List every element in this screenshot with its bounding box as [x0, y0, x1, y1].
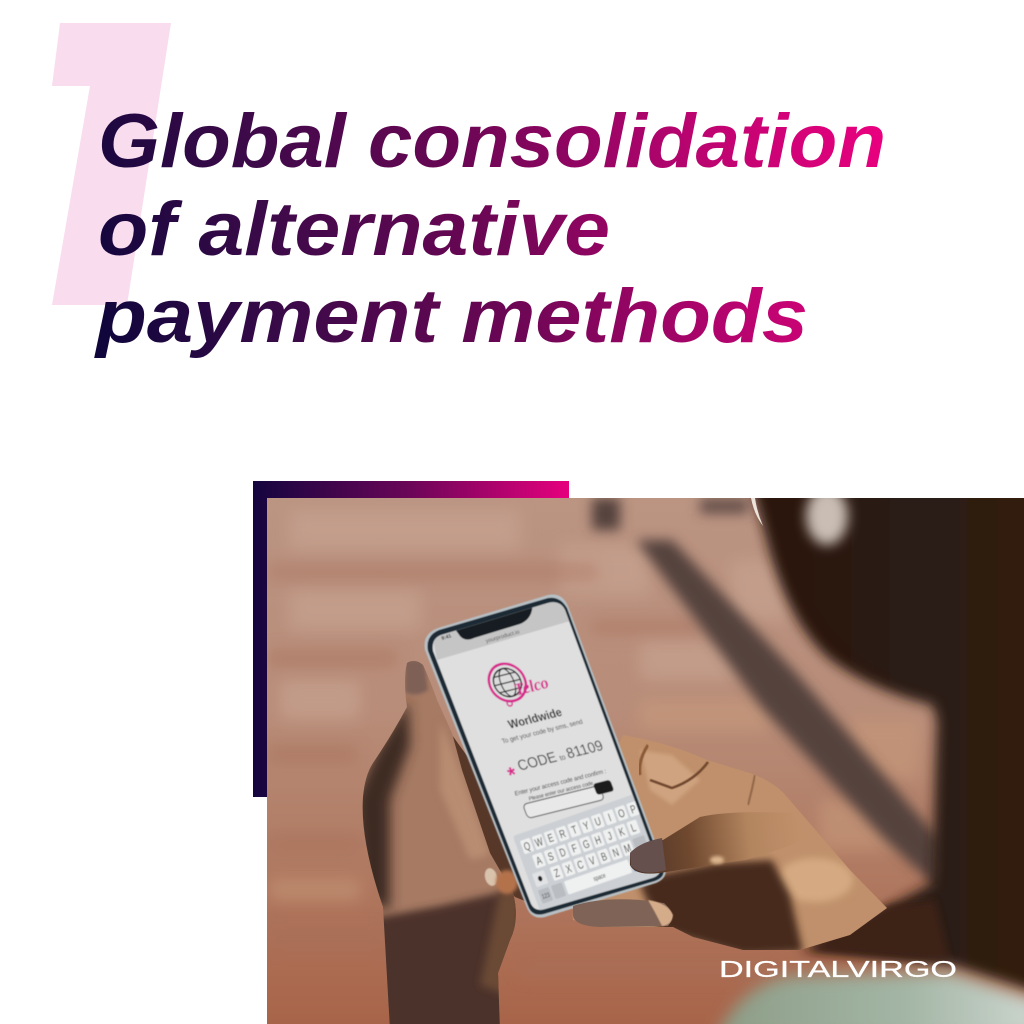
keyboard: Y — [582, 820, 591, 833]
screen content: to — [558, 753, 567, 762]
earring highlight — [806, 487, 848, 545]
keyboard: J — [606, 830, 614, 844]
notch — [456, 607, 533, 640]
head and body silhouette — [750, 480, 1024, 995]
screen content — [487, 662, 614, 819]
keyboard: Z — [553, 867, 562, 881]
title: of alternative — [98, 187, 610, 272]
keyboard: R — [558, 828, 568, 842]
keyboard: E — [546, 832, 556, 846]
title: payment methods — [94, 274, 808, 359]
screen content: 81109 — [564, 738, 606, 762]
screen content: CODE — [515, 749, 559, 775]
large pale pink numeral 1 — [52, 23, 171, 305]
keyboard: L — [629, 822, 638, 835]
photo: person holding phone — [267, 480, 1024, 1024]
right thumb over keyboard — [630, 812, 768, 874]
hand: left palm and thumb — [362, 660, 516, 1024]
phone body — [425, 594, 666, 918]
title: Global consolidation — [98, 99, 886, 184]
Digital Virgo logo: DIGITALVIRGO — [719, 956, 957, 982]
diagonal shadow on the ground — [592, 498, 940, 890]
blurred brick background — [267, 498, 1024, 1024]
keyboard: G — [581, 838, 592, 852]
screen content: Worldwide — [506, 707, 564, 732]
keyboard: I — [607, 812, 613, 825]
keyboard: B — [600, 851, 609, 864]
keyboard: O — [617, 807, 627, 821]
phone screen: yourproduct.io — [485, 629, 520, 645]
keyboard: U — [593, 816, 603, 829]
browser bar — [433, 601, 569, 660]
keyboard: N — [611, 847, 621, 860]
star icon: * — [504, 762, 522, 788]
phone — [420, 590, 670, 920]
screen content: Enter your access code and confirm : — [514, 769, 608, 798]
gradient photo frame — [253, 481, 569, 797]
fingertips behind phone — [483, 867, 518, 894]
keyboard: H — [593, 834, 603, 848]
keyboard: D — [558, 846, 568, 860]
OK button — [593, 780, 614, 795]
keyboard: M — [623, 842, 633, 856]
keyboard: Q — [522, 840, 533, 854]
keyboard: T — [570, 824, 579, 837]
keyboard: A — [535, 855, 544, 868]
keyboard: 123 — [541, 892, 551, 901]
keyboard: C — [576, 859, 586, 873]
title — [94, 99, 886, 359]
shoulder in pale green — [715, 972, 1024, 1024]
Telco logo: Telco — [511, 673, 551, 699]
keyboard: S — [546, 850, 556, 864]
keyboard: F — [570, 842, 579, 856]
input box — [523, 785, 605, 819]
phone screen: 9:41 — [441, 633, 452, 642]
keyboard: W — [533, 836, 545, 850]
keyboard: V — [588, 855, 598, 868]
Telco logo — [487, 662, 548, 708]
keyboard: K — [617, 826, 627, 840]
keyboard: space — [593, 873, 607, 883]
screen content: To get your code by sms, send — [501, 718, 584, 745]
keyboard: P — [629, 803, 639, 817]
keyboard: X — [564, 863, 574, 877]
lower right finger below phone — [573, 899, 673, 927]
hand: right hand and fingers — [572, 735, 887, 950]
phone screen — [432, 601, 660, 911]
screen content: Please enter our access code — [528, 781, 594, 803]
keyboard — [514, 794, 658, 911]
hand: fingers behind phone on left — [452, 736, 525, 901]
